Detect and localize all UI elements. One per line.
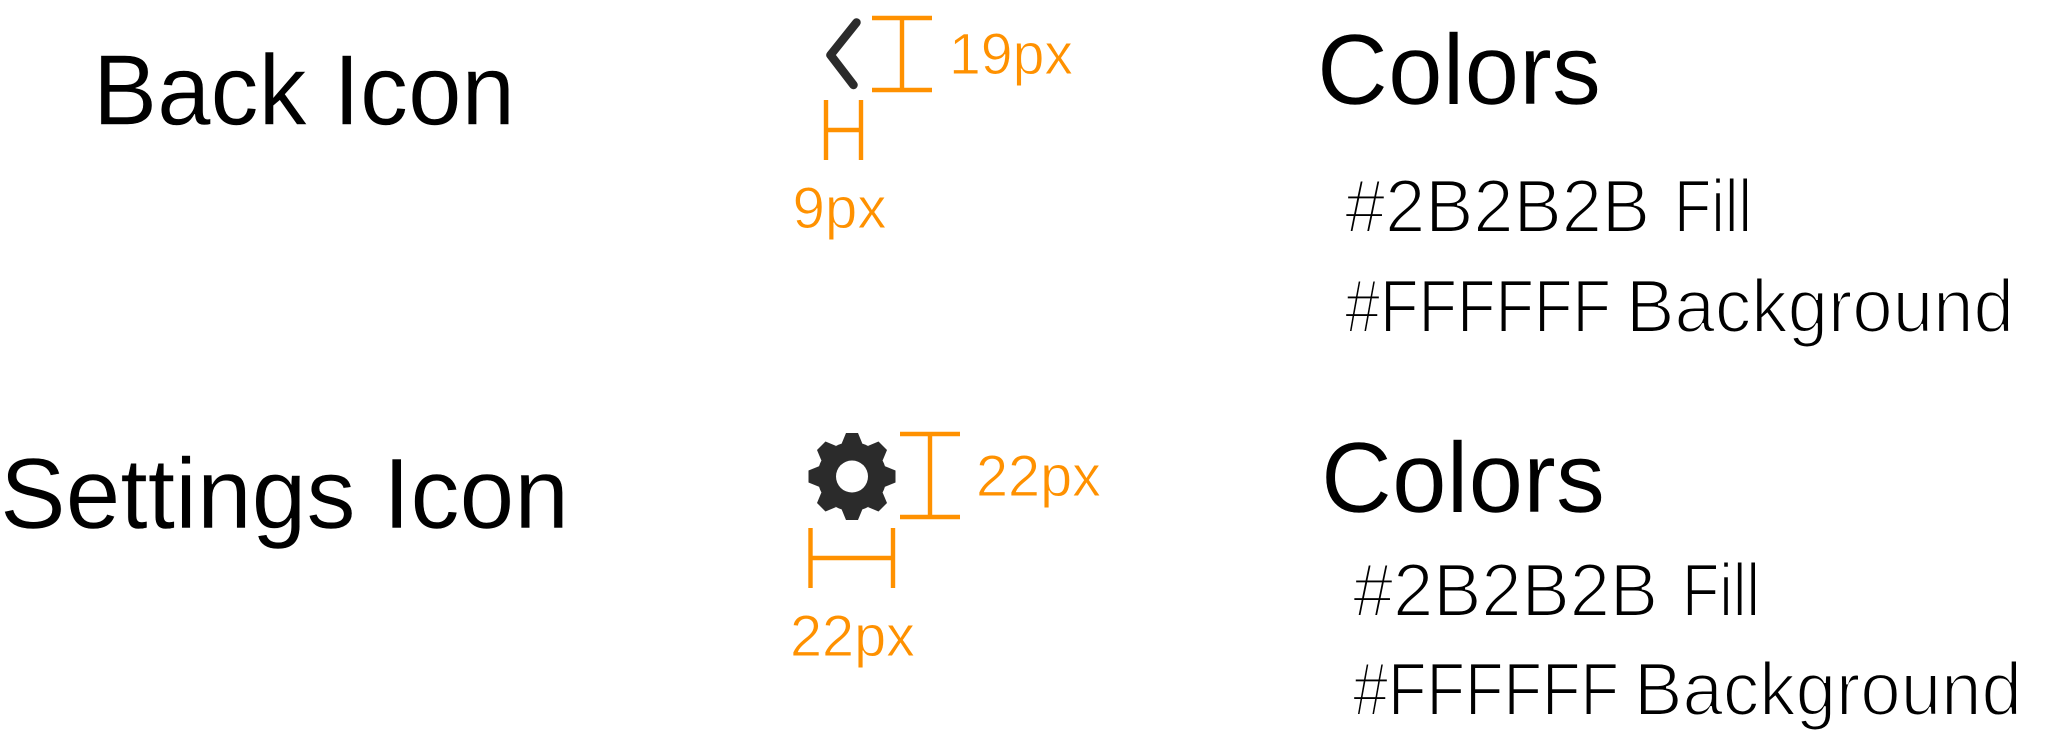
- heading: Settings Icon: Settings Icon: [0, 438, 569, 550]
- text: background color: [1345, 264, 2014, 348]
- icon: back chevron: [830, 22, 856, 85]
- label: 9px: 9px: [792, 176, 886, 241]
- text: fill color: #2B2B2B: [1353, 548, 1658, 632]
- text: fill color: #2B2B2B: [1345, 164, 1650, 248]
- text: fill color: Fill: [1682, 548, 1760, 632]
- text: fill color: Fill: [1674, 164, 1752, 248]
- text: background color: Background: [1626, 264, 2014, 348]
- text: background color: #FFFFFF: [1345, 264, 1611, 348]
- text: background color: [1353, 647, 2022, 731]
- label: 22px width: 22px: [790, 604, 915, 669]
- label: 22px height: 22px: [976, 444, 1101, 509]
- dimension: width bracket: [810, 528, 893, 588]
- label: 19px: 19px: [949, 22, 1073, 87]
- dimension: height bracket: [900, 434, 960, 517]
- text: background color: #FFFFFF: [1353, 647, 1619, 731]
- heading: Colors: Colors: [1321, 422, 1605, 534]
- heading: Back Icon: Back Icon: [93, 34, 515, 146]
- dimension: width bracket: [826, 100, 861, 160]
- text: background color: Background: [1634, 647, 2022, 731]
- dimension: height bracket: [872, 18, 932, 90]
- heading: Colors: Colors: [1317, 14, 1601, 126]
- panel: settings icon row: [0, 422, 2022, 731]
- icon: settings gear: [808, 433, 896, 520]
- panel: back icon row: [93, 14, 2014, 348]
